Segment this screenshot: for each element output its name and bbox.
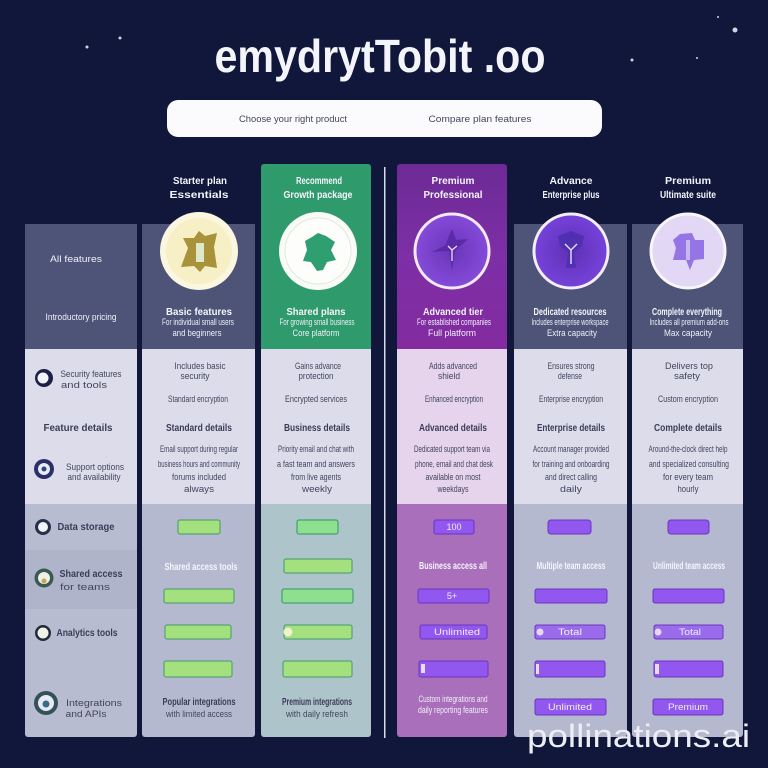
panel: column 4: Includes enterprise workspace bbox=[532, 317, 608, 327]
status bar: Unlimited bbox=[548, 702, 592, 712]
panel: row labels: and tools bbox=[61, 380, 108, 390]
panel: column 3 (highlighted purple): Adds advanced bbox=[429, 361, 477, 371]
panel: column 2 (highlighted green) bbox=[261, 164, 371, 737]
panel: column 5: Unlimited team access bbox=[653, 561, 725, 572]
panel: column 5: Complete everything bbox=[652, 307, 722, 318]
panel: column 5: Delivers top bbox=[665, 361, 713, 371]
panel: column 2 (highlighted green): Core platform bbox=[292, 328, 340, 338]
panel: column 2 (highlighted green): Recommend bbox=[296, 176, 342, 187]
panel: row labels: for teams bbox=[60, 582, 111, 592]
watermark: pollinations.ai bbox=[527, 718, 750, 754]
panel: column 4: Enterprise encryption bbox=[539, 394, 603, 404]
panel: column 5: Complete details bbox=[654, 423, 722, 434]
panel: column 4: daily bbox=[560, 484, 583, 494]
status bar: Total bbox=[558, 627, 582, 637]
title: emydrytTobit .oo bbox=[214, 30, 546, 82]
status bar: Premium bbox=[668, 702, 708, 712]
panel: row labels: and APIs bbox=[66, 709, 107, 719]
status bar bbox=[297, 520, 338, 534]
panel: column 3 (highlighted purple): Business access all bbox=[419, 561, 487, 572]
panel: column 4: Multiple team access bbox=[536, 561, 606, 572]
status bar bbox=[535, 699, 606, 715]
panel: column 4: Dedicated resources bbox=[534, 307, 607, 318]
status bar bbox=[419, 661, 488, 677]
status bar bbox=[284, 625, 352, 639]
status bar: 5+ bbox=[447, 591, 457, 601]
panel: column 5: for every team bbox=[663, 472, 713, 482]
panel: column 5: Custom encryption bbox=[658, 394, 718, 404]
panel: column 3 (highlighted purple): Custom integrations and bbox=[418, 694, 488, 704]
panel: column 5: Ultimate suite bbox=[660, 190, 716, 201]
divider bbox=[384, 167, 386, 738]
panel: column 5: Includes all premium add-ons bbox=[650, 317, 729, 327]
panel: column 4 bbox=[514, 176, 627, 737]
status bar: Total bbox=[679, 627, 701, 637]
panel: column 1: Popular integrations bbox=[162, 697, 236, 708]
panel: column 3 (highlighted purple): Premium bbox=[432, 176, 475, 187]
panel: column 5: and specialized consulting bbox=[649, 459, 729, 469]
status bar bbox=[165, 625, 231, 639]
panel: row labels: Introductory pricing bbox=[46, 312, 116, 322]
panel: column 3 (highlighted purple): phone, email and chat desk bbox=[415, 459, 493, 469]
icon: row 6 bbox=[34, 691, 58, 715]
panel: column 2 (highlighted green): Shared plans bbox=[286, 307, 346, 318]
subtitle pill bbox=[167, 100, 602, 137]
panel: column 1: For individual small users bbox=[162, 317, 234, 327]
panel: column 1: always bbox=[184, 484, 215, 494]
status bar bbox=[535, 589, 607, 603]
status bar bbox=[653, 699, 723, 715]
panel: column 1: Email support during regular bbox=[160, 444, 238, 454]
panel: column 1: Essentials bbox=[170, 190, 229, 201]
panel: column 4: Enterprise plus bbox=[542, 190, 600, 201]
status bar bbox=[164, 661, 232, 677]
subtitle pill: Compare plan features bbox=[428, 114, 532, 124]
panel: column 2 (highlighted green): with daily refresh bbox=[285, 709, 348, 719]
panel: column 3 (highlighted purple): Professional bbox=[424, 190, 483, 201]
panel: column 4: Account manager provided bbox=[533, 444, 609, 454]
panel: column 5 bbox=[632, 176, 743, 737]
status bar bbox=[654, 625, 723, 639]
panel: column 2 (highlighted green): Premium integrations bbox=[282, 697, 352, 708]
panel: column 2 (highlighted green): Growth package bbox=[284, 190, 353, 201]
status bar bbox=[653, 589, 724, 603]
panel: column 1: Includes basic bbox=[174, 361, 226, 371]
panel: row labels: Support options bbox=[66, 462, 124, 472]
icon: purple badge bbox=[415, 214, 489, 288]
panel: column 5: Premium bbox=[665, 176, 711, 187]
panel: column 2 (highlighted green): Business details bbox=[284, 423, 350, 434]
panel: column 4: for training and onboarding bbox=[532, 459, 610, 469]
panel: column 5: hourly bbox=[678, 484, 699, 494]
status bar bbox=[418, 589, 489, 603]
panel: column 4: defense bbox=[558, 371, 582, 381]
panel: column 3 (highlighted purple): weekdays bbox=[437, 484, 469, 494]
icon: violet badge bbox=[534, 214, 608, 288]
panel: column 1: forums included bbox=[172, 472, 226, 482]
panel: column 4: Ensures strong bbox=[548, 361, 594, 371]
status bar: 100 bbox=[446, 522, 462, 532]
icon: gold badge bbox=[160, 212, 238, 290]
panel: column 2 (highlighted green): a fast team and answers bbox=[277, 459, 355, 469]
icon: lavender badge bbox=[651, 214, 725, 288]
panel: column 3 (highlighted purple): daily reporting features bbox=[418, 705, 488, 715]
status bar bbox=[548, 520, 591, 534]
panel: row labels: Security features bbox=[60, 369, 122, 379]
icon: row 5 bbox=[35, 625, 51, 641]
status bar bbox=[434, 520, 474, 534]
status bar bbox=[164, 589, 234, 603]
status bar bbox=[283, 661, 352, 677]
panel: column 4: Extra capacity bbox=[547, 328, 597, 338]
panel: column 1: Standard encryption bbox=[168, 394, 228, 404]
panel: column 3 (highlighted purple): Full platform bbox=[428, 328, 476, 338]
panel: column 2 (highlighted green): from live agents bbox=[291, 472, 341, 482]
status bar bbox=[654, 661, 723, 677]
panel: column 3 (highlighted purple): Dedicated support team via bbox=[414, 444, 490, 454]
panel: column 2 (highlighted green): Gains advance bbox=[295, 361, 341, 371]
icon: row 4 bbox=[34, 568, 54, 588]
panel: column 2 (highlighted green): weekly bbox=[301, 484, 333, 494]
panel: column 3 (highlighted purple) bbox=[397, 164, 507, 737]
panel: row labels: Data storage bbox=[58, 522, 115, 533]
panel: column 2 (highlighted green): Encrypted services bbox=[285, 394, 347, 404]
panel: column 3 (highlighted purple): Enhanced encryption bbox=[425, 394, 483, 404]
panel: column 2 (highlighted green): protection bbox=[298, 371, 334, 381]
status bar bbox=[420, 625, 487, 639]
panel: column 1: and beginners bbox=[172, 328, 222, 338]
panel: column 1: Standard details bbox=[166, 423, 232, 434]
panel: column 2 (highlighted green): For growing small business bbox=[280, 317, 355, 327]
icon: green badge bbox=[279, 212, 357, 290]
status bar bbox=[282, 589, 353, 603]
status bar bbox=[535, 625, 605, 639]
panel: column 1: Basic features bbox=[166, 307, 232, 318]
panel: column 3 (highlighted purple): For established companies bbox=[417, 317, 491, 327]
panel: column 2 (highlighted green): Priority email and chat with bbox=[278, 444, 354, 454]
panel: row labels: Analytics tools bbox=[56, 628, 118, 639]
status bar bbox=[284, 559, 352, 573]
panel: row labels: Feature details bbox=[44, 423, 113, 434]
panel: row labels: and availability bbox=[68, 472, 121, 482]
status bar bbox=[178, 520, 220, 534]
panel: row labels: All features bbox=[50, 254, 103, 264]
panel: column 1: Starter plan bbox=[173, 176, 227, 187]
panel: row labels: Shared access bbox=[60, 569, 123, 580]
panel: column 4: and direct calling bbox=[545, 472, 597, 482]
decorative stars bbox=[86, 16, 738, 62]
panel: column 4: Enterprise details bbox=[537, 423, 605, 434]
panel: column 3 (highlighted purple): Advanced tier bbox=[423, 307, 483, 318]
panel: column 1: business hours and community bbox=[158, 459, 240, 469]
status bar bbox=[668, 520, 709, 534]
status bar bbox=[535, 661, 605, 677]
panel: column 1: Shared access tools bbox=[164, 562, 238, 573]
subtitle pill: Choose your right product bbox=[239, 114, 348, 124]
icon: row 3 bbox=[35, 519, 51, 535]
panel: column 5: Around-the-clock direct help bbox=[648, 444, 728, 454]
panel: column 1: security bbox=[180, 371, 210, 381]
status bar: Unlimited bbox=[434, 627, 480, 637]
panel: column 5: Max capacity bbox=[664, 328, 712, 338]
panel: column 1 bbox=[142, 176, 255, 737]
panel: column 1: with limited access bbox=[165, 709, 232, 719]
panel: column 3 (highlighted purple): available on most bbox=[426, 472, 481, 482]
panel: row labels bbox=[25, 224, 137, 737]
icon: row 2 bbox=[34, 459, 54, 479]
icon: row 1 bbox=[35, 369, 53, 387]
panel: row labels: Integrations bbox=[66, 698, 123, 708]
panel: column 3 (highlighted purple): Advanced details bbox=[419, 423, 487, 434]
panel: column 3 (highlighted purple): shield bbox=[438, 371, 460, 381]
panel: column 5: safety bbox=[674, 371, 701, 381]
panel: column 4: Advance bbox=[550, 176, 593, 187]
